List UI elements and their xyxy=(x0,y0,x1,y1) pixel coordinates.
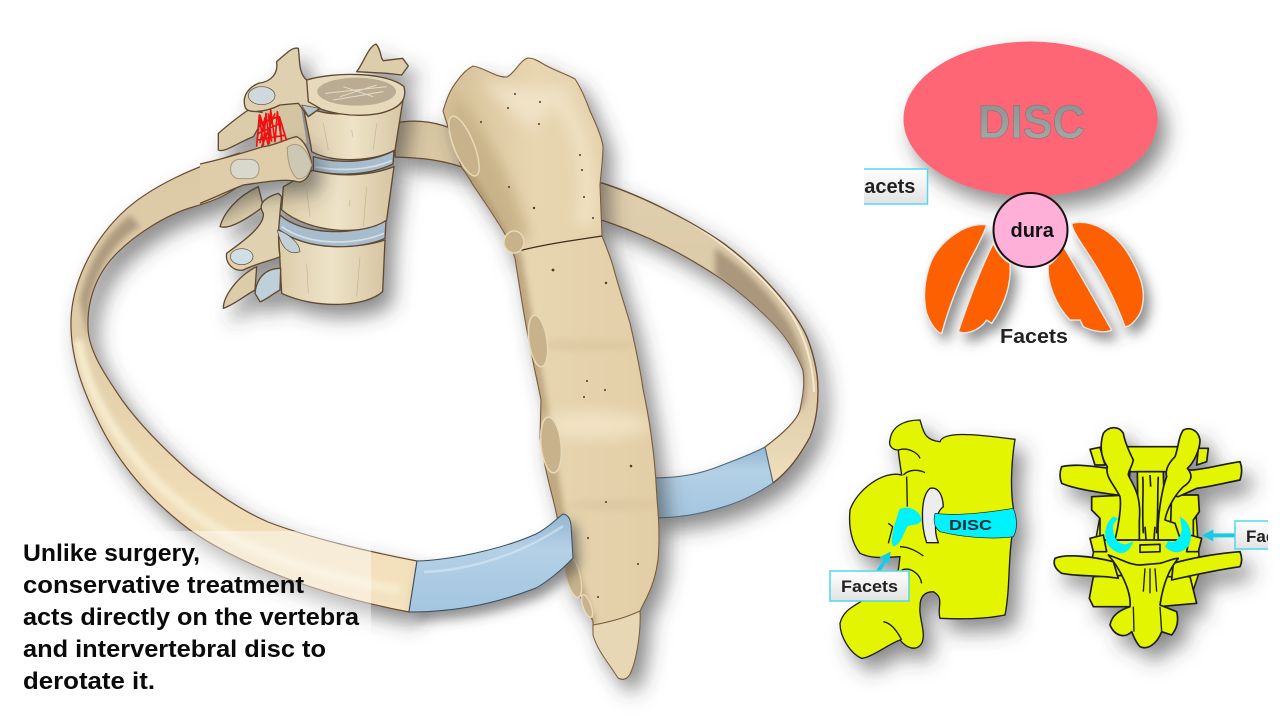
left cyan arc xyxy=(1105,517,1133,553)
lower vertebra xyxy=(1054,535,1242,648)
vertebral column with discs and processes xyxy=(218,44,408,308)
rib: right posterior arc with cartilage xyxy=(395,121,818,518)
text block: conservative treatment statement: acts directly on the vertebra xyxy=(23,604,360,631)
vertebra 2 body xyxy=(282,167,394,230)
dura circle xyxy=(994,193,1068,267)
diagram: lateral lumbar vertebrae xyxy=(830,420,1016,658)
cyan disc xyxy=(934,508,1016,538)
manubrium joint line xyxy=(515,236,602,252)
lamina behind nerve scribble xyxy=(257,102,307,150)
rib: left anterior arc xyxy=(71,137,417,612)
facets callout xyxy=(830,571,909,601)
text block: conservative treatment statement: Unlike surgery, xyxy=(23,540,200,567)
upper vertebra xyxy=(1060,428,1242,540)
vertebra 3 body xyxy=(278,230,385,304)
text block: conservative treatment statement: derotate it. xyxy=(23,668,155,695)
disc ellipse xyxy=(904,42,1158,196)
xiphoid process xyxy=(593,611,640,679)
sternum xyxy=(443,58,665,679)
vertebral endplate xyxy=(307,74,405,115)
disc label: DISC xyxy=(949,517,992,534)
right posterior process xyxy=(357,44,408,75)
dura label: dura xyxy=(1010,220,1055,242)
yellow backing between vertebrae xyxy=(1092,500,1200,600)
sternal shading xyxy=(450,80,665,625)
sternal notches xyxy=(443,113,595,619)
diagram: posterior lumbar vertebrae xyxy=(1054,428,1280,648)
facets callout, clipped xyxy=(864,168,928,205)
cancellous bone surface xyxy=(317,78,396,106)
text block: conservative treatment statement: and intervertebral disc to xyxy=(23,636,326,663)
rib neck and tubercle at vertebra xyxy=(200,137,312,203)
right cyan arc xyxy=(1165,517,1191,552)
rib cartilage: left blue segment xyxy=(409,514,573,612)
facets callout, clipped: Facets xyxy=(852,176,915,198)
foramina specks xyxy=(480,93,639,598)
lower transverse process xyxy=(220,187,263,227)
yellow vertebra silhouette xyxy=(840,420,1015,658)
neural foramen xyxy=(922,488,943,543)
facets callout, clipped xyxy=(1234,520,1268,550)
vertebra 1 body xyxy=(303,93,404,160)
facet pointer arrow xyxy=(875,552,891,574)
facets callout: Facets xyxy=(841,577,898,596)
cyan facet joint xyxy=(892,508,922,547)
red nerve scribble xyxy=(257,110,287,147)
lower pedicle and facet xyxy=(226,193,282,270)
text block: conservative treatment statement: conservative treatment xyxy=(23,572,304,599)
text block: conservative treatment statement xyxy=(23,540,360,695)
diagram: disc, dura and facets xyxy=(840,42,1158,348)
facet pointer arrow xyxy=(1202,529,1235,541)
facet wedges xyxy=(925,222,1143,333)
translucent text backing xyxy=(0,531,371,720)
superior process and facet xyxy=(244,48,320,117)
facets label: Facets xyxy=(1000,325,1068,348)
disc 2 xyxy=(278,215,386,247)
disc label: DISC xyxy=(978,95,1085,148)
disc 1 xyxy=(313,151,394,174)
upper transverse process xyxy=(218,110,267,151)
lowest processes xyxy=(223,267,257,308)
vertebral striations xyxy=(307,123,377,297)
